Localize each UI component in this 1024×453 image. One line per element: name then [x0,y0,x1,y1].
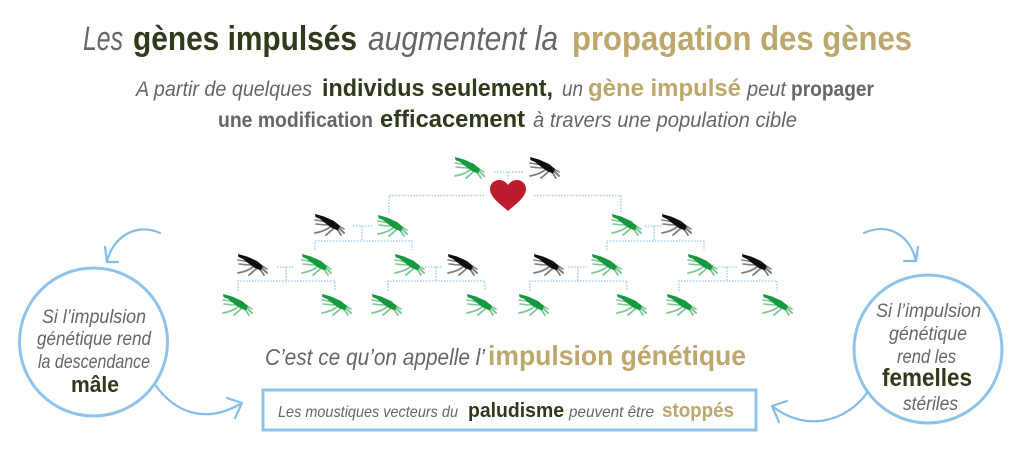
subtitle: à travers une population cible [533,109,797,132]
icon: black mosquito parent [530,157,559,178]
heading: impulsion génétique: impulsion génétique [488,340,746,371]
arrow: top right [864,229,918,261]
icon: green mosquito parent [455,157,484,178]
callout box: paludisme [468,400,564,422]
subtitle: A partir de quelques [134,78,312,101]
panel: female circle: Si l’impulsion [876,301,981,322]
subtitle: un [562,78,583,101]
callout box [263,390,756,430]
title: propagation des gènes [572,20,912,58]
subtitle: efficacement [380,106,525,133]
panel: male circle [20,268,168,416]
heading: impulsion génétique [265,340,746,371]
panel: female circle: génétique [889,324,967,345]
title: Les [83,20,123,58]
heading: impulsion génétique: C’est ce qu’on appelle l’ [265,344,486,370]
panel: male circle: génétique rend [37,329,152,350]
subtitle: une modification [218,109,373,132]
arrow: top left [105,229,160,262]
arrow: bottom right [772,393,867,422]
panel: male circle: la descendance [38,352,150,373]
callout box: stoppés [662,400,734,422]
subtitle [134,75,874,133]
title: augmentent la [368,20,558,58]
mosquitoes generation 3 [238,254,771,275]
subtitle: propager [791,78,874,101]
panel: female circle: femelles [882,364,972,392]
subtitle: peut [746,78,787,101]
icon: heart [490,180,526,211]
title [83,20,912,58]
callout box: peuvent être [568,404,654,421]
subtitle: gène impulsé [588,75,741,102]
subtitle: individus seulement, [322,75,553,102]
arrow: bottom left [156,386,242,418]
family tree diagram [223,157,792,315]
title: gènes impulsés [133,20,357,58]
panel: female circle: stériles [903,394,958,415]
panel: male circle: Si l’impulsion [42,307,146,328]
mosquitoes generation 4 [223,294,792,315]
callout box: Les moustiques vecteurs du [278,404,458,421]
panel: female circle: rend les [897,347,956,368]
panel: female circle [854,275,1002,423]
mosquitoes generation 2 [315,214,691,236]
panel: male circle: mâle [71,372,119,397]
